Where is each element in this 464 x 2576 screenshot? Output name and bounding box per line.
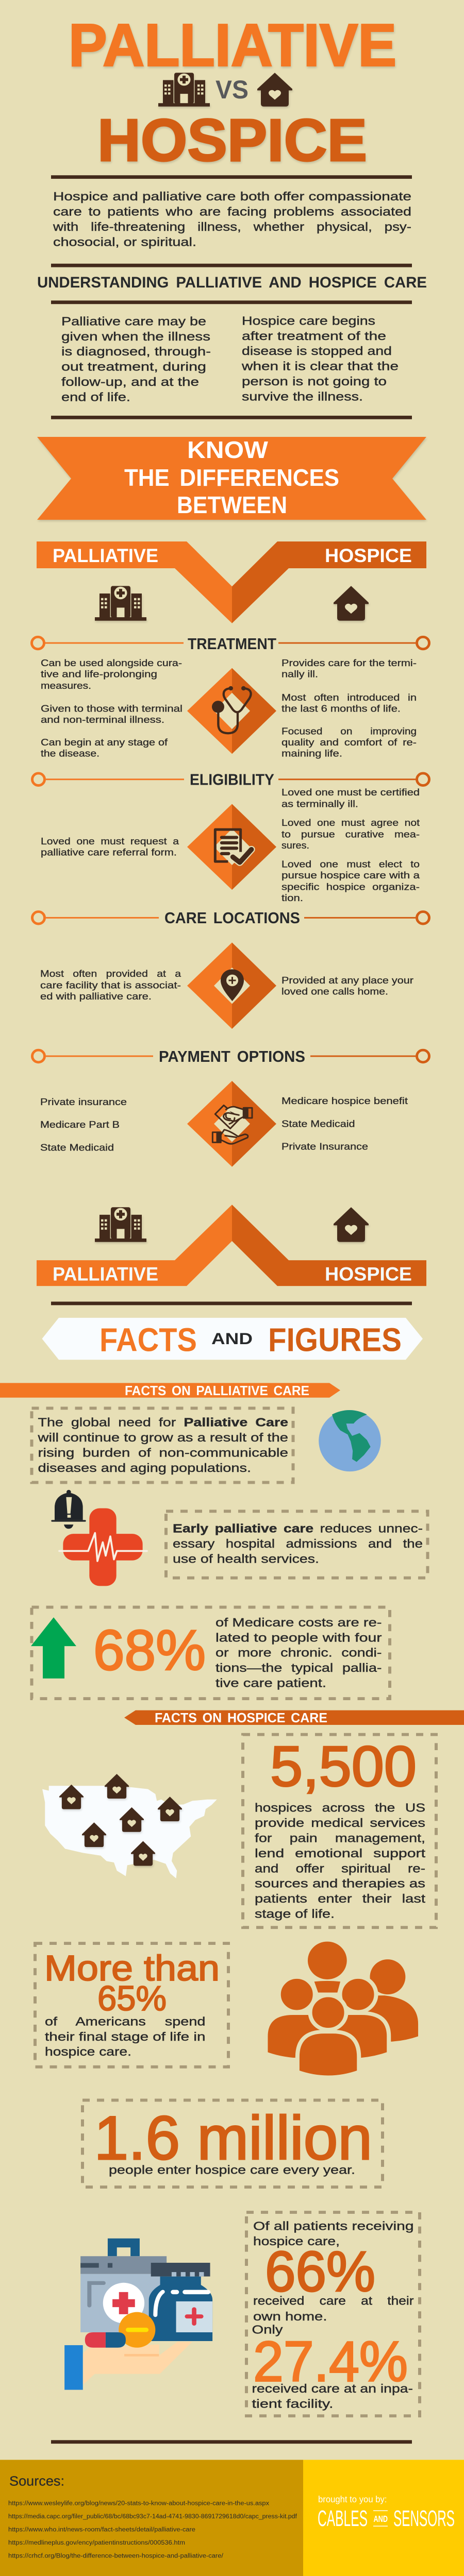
intro paragraph [53, 190, 411, 249]
title: Palliative: PALLIATIVE [69, 12, 396, 78]
fact card: 5,500 hospices: hospices across the US [255, 1801, 425, 1815]
treatment: palliative text: Can be used alongside cura- [41, 657, 182, 668]
ribbon: facts on hospice care: FACTS ON HOSPICE CARE [155, 1711, 327, 1725]
diamond icon: document with check [187, 804, 276, 890]
eligibility: palliative text [41, 836, 179, 857]
payment: palliative list: State Medicaid [40, 1142, 114, 1153]
payment: hospice list [281, 1095, 408, 1151]
payment: hospice list: State Medicaid [281, 1118, 355, 1129]
badge: facts and figures: FIGURES [268, 1321, 402, 1358]
text block: palliative definition [61, 315, 211, 404]
section header: treatment: TREATMENT [188, 635, 276, 653]
text block: palliative definition: is diagnosed, through- [61, 345, 211, 359]
fact card: more than 65 percent: their final stage of life in [45, 2030, 205, 2044]
fact card: where patients receive care: 27.4% [253, 2330, 408, 2393]
badge: facts and figures [42, 1318, 423, 1360]
chevron footer: palliative: PALLIATIVE [53, 1263, 158, 1284]
treatment: hospice text: nally ill. [281, 669, 318, 680]
treatment: hospice text: Most often introduced in [281, 692, 417, 703]
fact card: where patients receive care: tient facility. [252, 2397, 333, 2411]
diamond icon: hands exchanging money [187, 1081, 276, 1167]
fact card: 68 percent of medicare costs: of Medicare costs are re- [216, 1616, 382, 1630]
section header: payment options [32, 1047, 429, 1065]
fact card: 5,500 hospices: sources and therapies as [255, 1877, 425, 1891]
heading: understanding: UNDERSTANDING PALLIATIVE AND HOSPICE CARE [37, 274, 427, 291]
chevron header: hospice [232, 541, 426, 623]
treatment: palliative text: and non-terminal illness. [41, 714, 164, 725]
fact card: more than 65 percent [35, 1943, 228, 2067]
icon: group of people [266, 1942, 418, 2077]
chevron footer: hospice: HOSPICE [325, 1263, 412, 1284]
treatment: palliative text: Given to those with terminal [41, 703, 183, 714]
treatment: hospice text [281, 657, 417, 759]
fact card: 5,500 hospices: 5,500 [270, 1735, 417, 1798]
eligibility: hospice text: Loved one must agree not [281, 817, 420, 828]
text block: hospice definition [241, 314, 399, 403]
icon: medical kit, medicine bottle and hand [64, 2239, 212, 2390]
fact card: 1.6 million: 1.6 million [94, 2104, 372, 2173]
chevron header: hospice: HOSPICE [325, 545, 412, 566]
treatment: palliative text: tive and life-prolonging [41, 669, 157, 680]
fact card: global need [32, 1408, 293, 1482]
text block: hospice definition: person is not going to [242, 375, 387, 388]
fact card: 68 percent of medicare costs: or more chronic. condi- [216, 1646, 382, 1660]
eligibility: hospice text: Loved one must elect to [281, 859, 420, 869]
fact card: 5,500 hospices: stage of life. [255, 1907, 335, 1921]
text block: palliative definition: follow-up, and at the [61, 375, 199, 389]
icon: hospital [158, 73, 210, 107]
eligibility: palliative text: Loved one must request a [41, 836, 179, 846]
footer panel: sources: Sources: [9, 2475, 64, 2488]
eligibility: hospice text: to pursue curative mea- [281, 829, 420, 839]
care locations: palliative text [40, 968, 181, 1002]
eligibility: hospice text: tion. [281, 892, 303, 903]
fact card: 5,500 hospices: and offer spiritual re- [255, 1862, 425, 1875]
fact card: early palliative care: Early palliative care reduces unnec- [173, 1522, 423, 1535]
treatment: hospice text: the last 6 months of life. [281, 703, 401, 714]
fact card: where patients receive care: received care at their [253, 2294, 414, 2308]
icon: green up arrow [31, 1617, 76, 1679]
ribbon: facts on palliative care [0, 1383, 340, 1398]
fact card: where patients receive care: Only [252, 2323, 283, 2336]
fact card: early palliative care [166, 1511, 428, 1578]
footer panel: brand: AND [373, 2514, 388, 2524]
footer panel: sources [0, 2460, 303, 2576]
chevron footer: palliative [37, 1205, 232, 1286]
chevron header: palliative: PALLIATIVE [53, 545, 158, 566]
fact card: 5,500 hospices: lend emotional support [255, 1846, 425, 1860]
footer panel: sources: https://media.capc.org/filer_public/68/bc/68bc93c7-14ad-4741-9830-8691729618d0/capc_press-kit.pdf [8, 2513, 297, 2520]
fact card: where patients receive care: Of all patients receiving [253, 2219, 413, 2233]
text block: hospice definition: Hospice care begins [242, 314, 375, 328]
section header: care locations: CARE LOCATIONS [164, 909, 300, 927]
chevron footer: hospice [232, 1205, 426, 1286]
banner: know the differences [37, 437, 426, 520]
fact card: more than 65 percent: 65% [97, 1979, 167, 2018]
text block: palliative definition: given when the illness [61, 330, 210, 344]
fact card: 5,500 hospices: patients enter their last [255, 1892, 425, 1906]
fact card: 68 percent of medicare costs: tive care patient. [216, 1676, 326, 1690]
fact card: 68 percent of medicare costs: 68% [93, 1618, 206, 1682]
footer panel: sources: https://www.who.int/news-room/fact-sheets/detail/palliative-care [8, 2526, 195, 2533]
icon: alarm bell [51, 1490, 86, 1529]
banner: know the differences: KNOW [187, 437, 268, 463]
eligibility: hospice text [281, 787, 420, 903]
treatment: palliative text: measures. [41, 680, 91, 691]
eligibility: hospice text: as terminally ill. [281, 799, 358, 809]
treatment: palliative text: the disease. [41, 748, 100, 759]
fact card: global need: rising burden of non-communicable [38, 1446, 288, 1460]
fact card: more than 65 percent: of Americans spend [45, 2015, 205, 2028]
badge: facts and figures: AND [211, 1329, 253, 1348]
fact card: 5,500 hospices: for pain management, [255, 1832, 425, 1845]
eligibility: hospice text: specific hospice organiza- [281, 882, 420, 892]
icon: house [334, 1207, 369, 1242]
fact card: 5,500 hospices [243, 1735, 436, 1927]
payment: palliative list: Medicare Part B [40, 1119, 120, 1130]
icon: hospital [95, 586, 146, 621]
treatment: hospice text: maining life. [281, 748, 342, 759]
eligibility: hospice text: Loved one must be certified [281, 787, 420, 798]
chevron header: palliative [37, 541, 232, 623]
fact card: where patients receive care: 66% [265, 2240, 375, 2303]
map: US with hospice houses [42, 1774, 217, 1878]
section header: care locations [32, 909, 429, 927]
section header: eligibility [32, 771, 429, 788]
eligibility: hospice text: pursue hospice care with a [281, 870, 420, 880]
section header: treatment [32, 635, 429, 653]
care locations: hospice text [281, 975, 413, 996]
text block: palliative definition: Palliative care may be [61, 315, 206, 328]
footer panel: sources: https://www.wesleylife.org/blog/news/20-stats-to-know-about-hospice-care-in-the-us.aspx [8, 2500, 270, 2507]
fact card: 68 percent of medicare costs: lated to people with four [216, 1631, 382, 1645]
ribbon: facts on hospice care [124, 1710, 464, 1725]
care locations: hospice text: loved one calls home. [281, 986, 388, 996]
fact card: more than 65 percent: hospice care. [45, 2045, 131, 2059]
icon: house [334, 586, 369, 621]
fact card: where patients receive care: own home. [253, 2310, 327, 2324]
footer panel: brand: CABLES [318, 2506, 368, 2531]
payment: hospice list: Private Insurance [281, 1141, 368, 1151]
icon: hospital [95, 1207, 146, 1242]
text block: palliative definition: end of life. [61, 391, 130, 404]
fact card: 68 percent of medicare costs: tions—the typical pallia- [216, 1661, 382, 1675]
fact card: more than 65 percent: More than [44, 1948, 220, 1988]
footer panel: sources: https://medlineplus.gov/ency/patientinstructions/000536.htm [8, 2539, 185, 2546]
intro paragraph: care to patients who are facing problems associated [53, 205, 411, 219]
fact card: early palliative care: use of health services. [173, 1552, 319, 1566]
footer panel: sources: https://crhcf.org/Blog/the-difference-between-hospice-and-palliative-care/ [8, 2552, 224, 2560]
footer panel: brand: brought to you by: [318, 2494, 387, 2504]
fact card: where patients receive care [246, 2212, 420, 2416]
fact card: where patients receive care: received care at an inpa- [252, 2382, 413, 2396]
banner: know the differences: THE DIFFERENCES [124, 465, 339, 491]
icon: medical cross with heartbeat [59, 1508, 147, 1586]
care locations: palliative text: ed with palliative care. [40, 991, 152, 1002]
fact card: global need: diseases and aging populations. [38, 1461, 251, 1475]
payment: hospice list: Medicare hospice benefit [281, 1095, 408, 1106]
care locations: palliative text: Most often provided at a [40, 968, 181, 979]
icon: globe [319, 1410, 381, 1471]
text block: palliative definition: out treatment, during [61, 360, 206, 374]
eligibility: hospice text: sures. [281, 840, 309, 851]
text block: hospice definition: after treatment of the [242, 329, 386, 343]
treatment: palliative text [41, 657, 183, 759]
care locations: palliative text: care facility that is associat- [40, 980, 181, 991]
payment: palliative list: Private insurance [40, 1096, 127, 1107]
care locations: hospice text: Provided at any place your [281, 975, 413, 986]
text block: hospice definition: survive the illness. [242, 390, 363, 403]
title: Hospice: HOSPICE [97, 107, 367, 174]
fact card: where patients receive care: hospice care, [253, 2234, 340, 2248]
fact card: global need: will continue to grow as a result of the [37, 1431, 288, 1445]
eligibility: palliative text: palliative care referral form. [41, 846, 177, 857]
treatment: hospice text: Focused on improving [281, 726, 417, 736]
diamond icon: location pin [187, 942, 276, 1029]
fact card: 5,500 hospices: provide medical services [255, 1816, 425, 1830]
text block: hospice definition: disease is stopped and [242, 344, 392, 358]
section header: eligibility: ELIGIBILITY [190, 771, 274, 788]
vs label: VS [216, 75, 248, 104]
fact card: early palliative care: essary hospital admissions and the [173, 1537, 423, 1551]
badge: facts and figures: FACTS [100, 1321, 197, 1358]
payment: palliative list [40, 1096, 127, 1153]
treatment: hospice text: Provides care for the termi- [281, 657, 417, 668]
section header: payment options: PAYMENT OPTIONS [159, 1047, 305, 1065]
fact card: 68 percent of medicare costs [31, 1607, 390, 1699]
diamond icon: stethoscope [187, 668, 276, 754]
intro paragraph: Hospice and palliative care both offer compassionate [53, 190, 411, 204]
fact card: 1.6 million: people enter hospice care every year. [109, 2163, 355, 2177]
treatment: hospice text: quality and comfort of re- [281, 737, 417, 748]
intro paragraph: chosocial, or spiritual. [53, 235, 196, 249]
text block: hospice definition: when it is clear that the [241, 360, 399, 374]
ribbon: facts on palliative care: FACTS ON PALLIATIVE CARE [125, 1384, 309, 1398]
treatment: palliative text: Can begin at any stage of [41, 737, 168, 748]
banner: know the differences: BETWEEN [177, 492, 287, 518]
fact card: global need: The global need for Palliative Care [38, 1416, 288, 1430]
icon: house with heart [257, 73, 292, 107]
intro paragraph: with life-threatening illness, whether physical, psy- [53, 220, 411, 234]
footer panel: brand [303, 2460, 464, 2576]
